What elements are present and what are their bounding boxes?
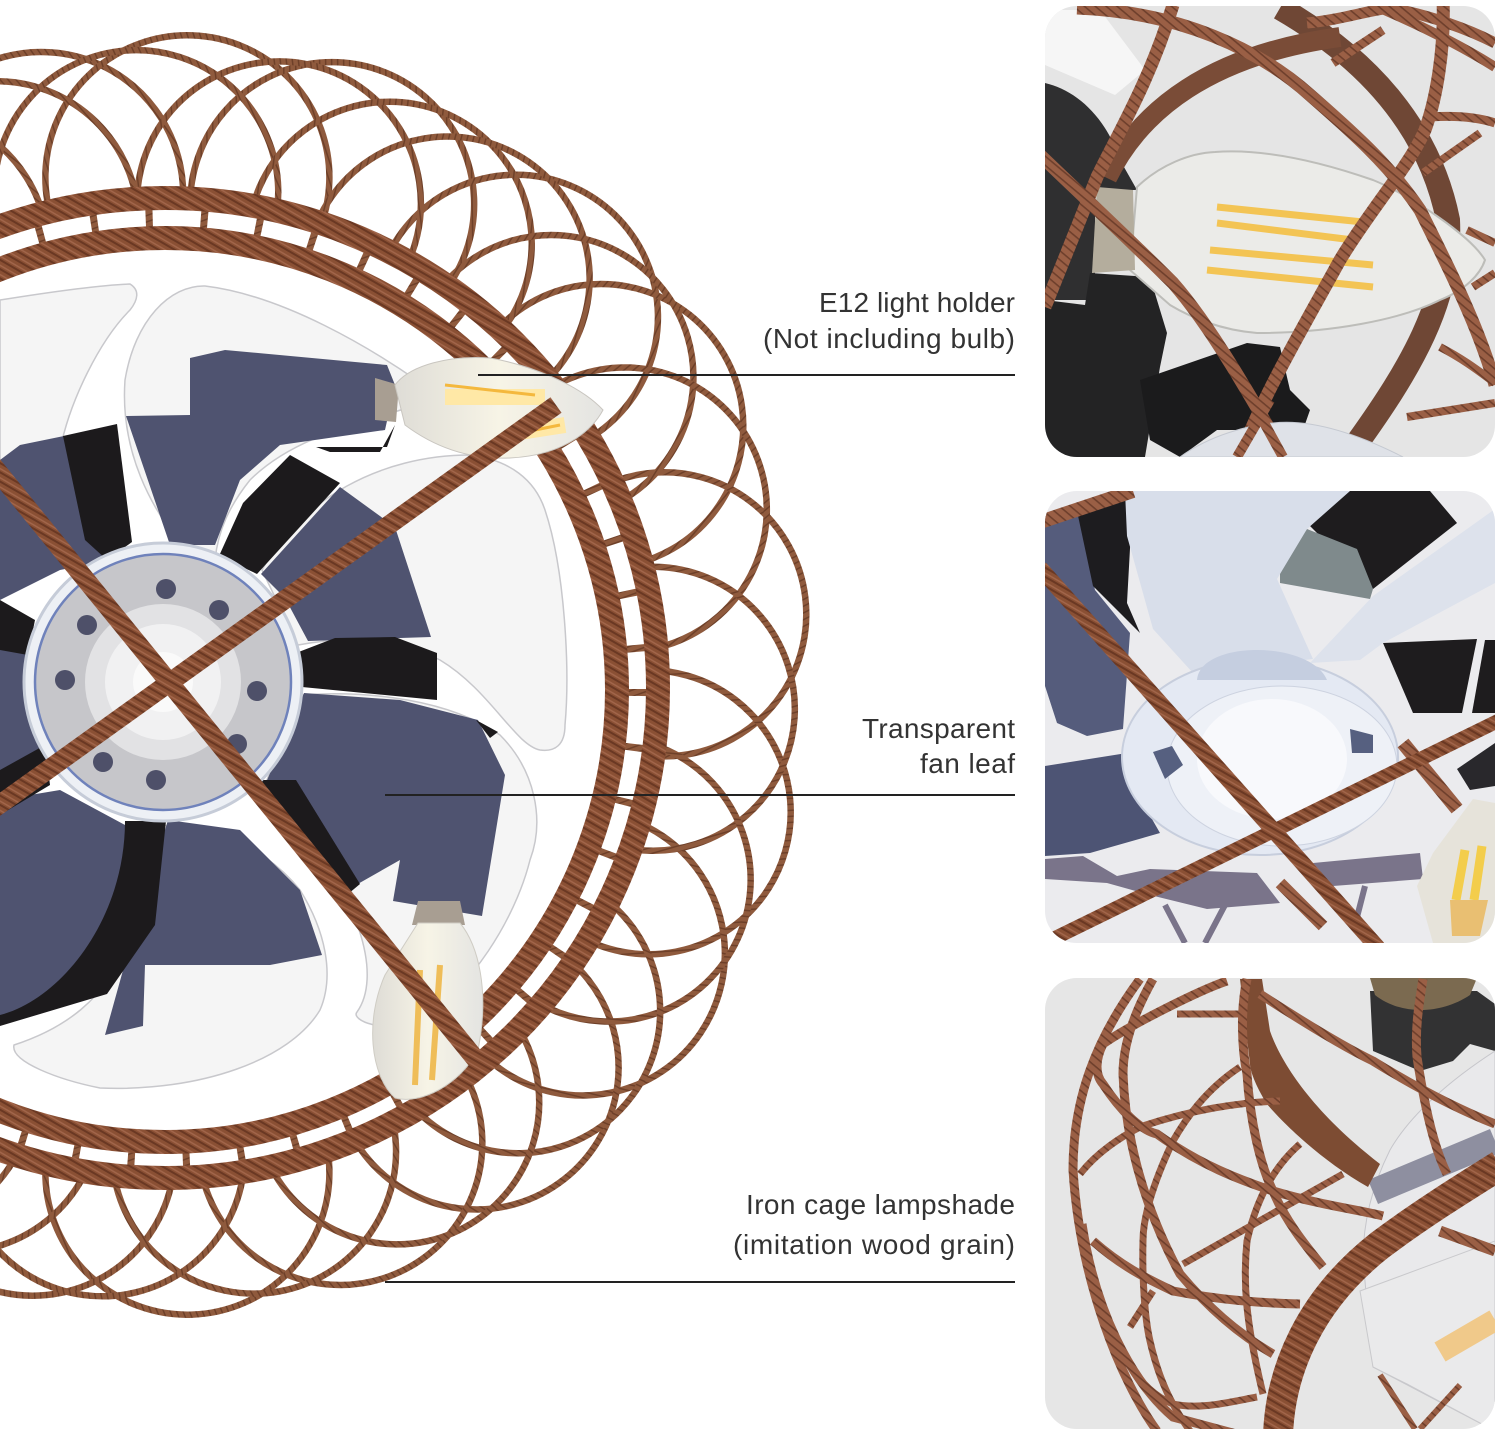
transparent fan blades base	[0, 284, 567, 1088]
iron cage loops	[0, 20, 824, 1329]
bulb top	[1370, 978, 1477, 1010]
label: E12 light holder	[763, 287, 1015, 354]
label: transparent fan leaf	[862, 713, 1015, 779]
wood cross bars	[0, 405, 556, 1062]
label: iron cage lampshade	[733, 1189, 1015, 1260]
clear blade right	[1310, 509, 1495, 663]
blade: lower right	[265, 694, 537, 1026]
black socket	[1457, 743, 1495, 790]
blade: top	[124, 286, 440, 560]
label: iron cage lampshade: (imitation wood grain)	[733, 1229, 1015, 1260]
wide ring band	[1278, 1165, 1500, 1436]
label: E12 light holder: (Not including bulb)	[763, 323, 1015, 354]
label: transparent fan leaf: Transparent	[862, 713, 1015, 744]
shadow legs	[1165, 886, 1365, 943]
black motor sectors	[0, 424, 498, 1026]
band over blade	[1237, 400, 1283, 457]
lower lamp socket base	[412, 901, 465, 925]
black bracket	[1140, 343, 1310, 457]
black sector right	[1383, 639, 1477, 713]
label: iron cage lampshade: Iron cage lampshade	[746, 1189, 1015, 1220]
photo panel: cage close-up	[1045, 978, 1500, 1436]
photo panel: bulb close-up	[1040, 0, 1495, 465]
glass bulb	[1360, 1241, 1495, 1431]
bulb glow	[1440, 1320, 1495, 1352]
grey motor area	[1280, 529, 1373, 599]
black sector far right	[1472, 640, 1495, 713]
upper lamp socket	[375, 378, 399, 422]
bulb base	[1092, 187, 1135, 273]
leader line: lampshade	[385, 1281, 1015, 1283]
clear blade	[1363, 1051, 1495, 1431]
blade: bottom	[14, 826, 327, 1088]
inner wide ring	[1240, 979, 1380, 1187]
outer thick wood ring	[0, 198, 658, 1178]
leader line: light holder	[478, 374, 1015, 376]
photo panel: fan blades close-up	[1040, 491, 1500, 948]
filaments	[1207, 207, 1373, 287]
blurred white fixture	[1045, 10, 1145, 95]
glass bulb	[1130, 151, 1485, 333]
wood rear bands	[1040, 491, 1457, 926]
wide dark ring behind bulb	[1280, 8, 1448, 450]
blade: top left	[0, 284, 137, 495]
lilac shadow right	[1313, 853, 1423, 886]
label: E12 light holder: E12 light holder	[819, 287, 1015, 318]
upper bulb	[395, 357, 603, 458]
black sector left	[1077, 494, 1140, 633]
main fan illustration	[0, 20, 824, 1329]
hub cover	[24, 543, 302, 821]
leader line: fan leaf	[385, 794, 1015, 796]
cage wires	[1073, 979, 1495, 1435]
wood cross bands	[1040, 568, 1500, 948]
blade: right	[262, 455, 567, 750]
dark top right sector	[1310, 491, 1457, 589]
lower bulb	[1417, 799, 1495, 943]
lower bulb	[373, 923, 483, 1099]
black lamp body	[1045, 83, 1167, 457]
navy motor lower	[1045, 753, 1160, 856]
wood cage bands	[1045, 6, 1495, 428]
navy motor body	[0, 350, 505, 1035]
lilac shadow strip	[1045, 856, 1280, 909]
hub	[1122, 650, 1398, 855]
clear blade top	[1125, 491, 1350, 673]
grey streak	[1373, 1141, 1495, 1192]
inner wood ring	[0, 238, 617, 1142]
white interior of cage	[0, 198, 657, 1178]
black lamp socket	[1370, 991, 1495, 1071]
wide upper arm	[1107, 37, 1340, 178]
ties between rings	[0, 219, 637, 1159]
hub screw holes	[55, 579, 267, 790]
blade tip	[1180, 422, 1403, 457]
navy motor upper	[1045, 509, 1130, 736]
label: transparent fan leaf: fan leaf	[920, 748, 1015, 779]
